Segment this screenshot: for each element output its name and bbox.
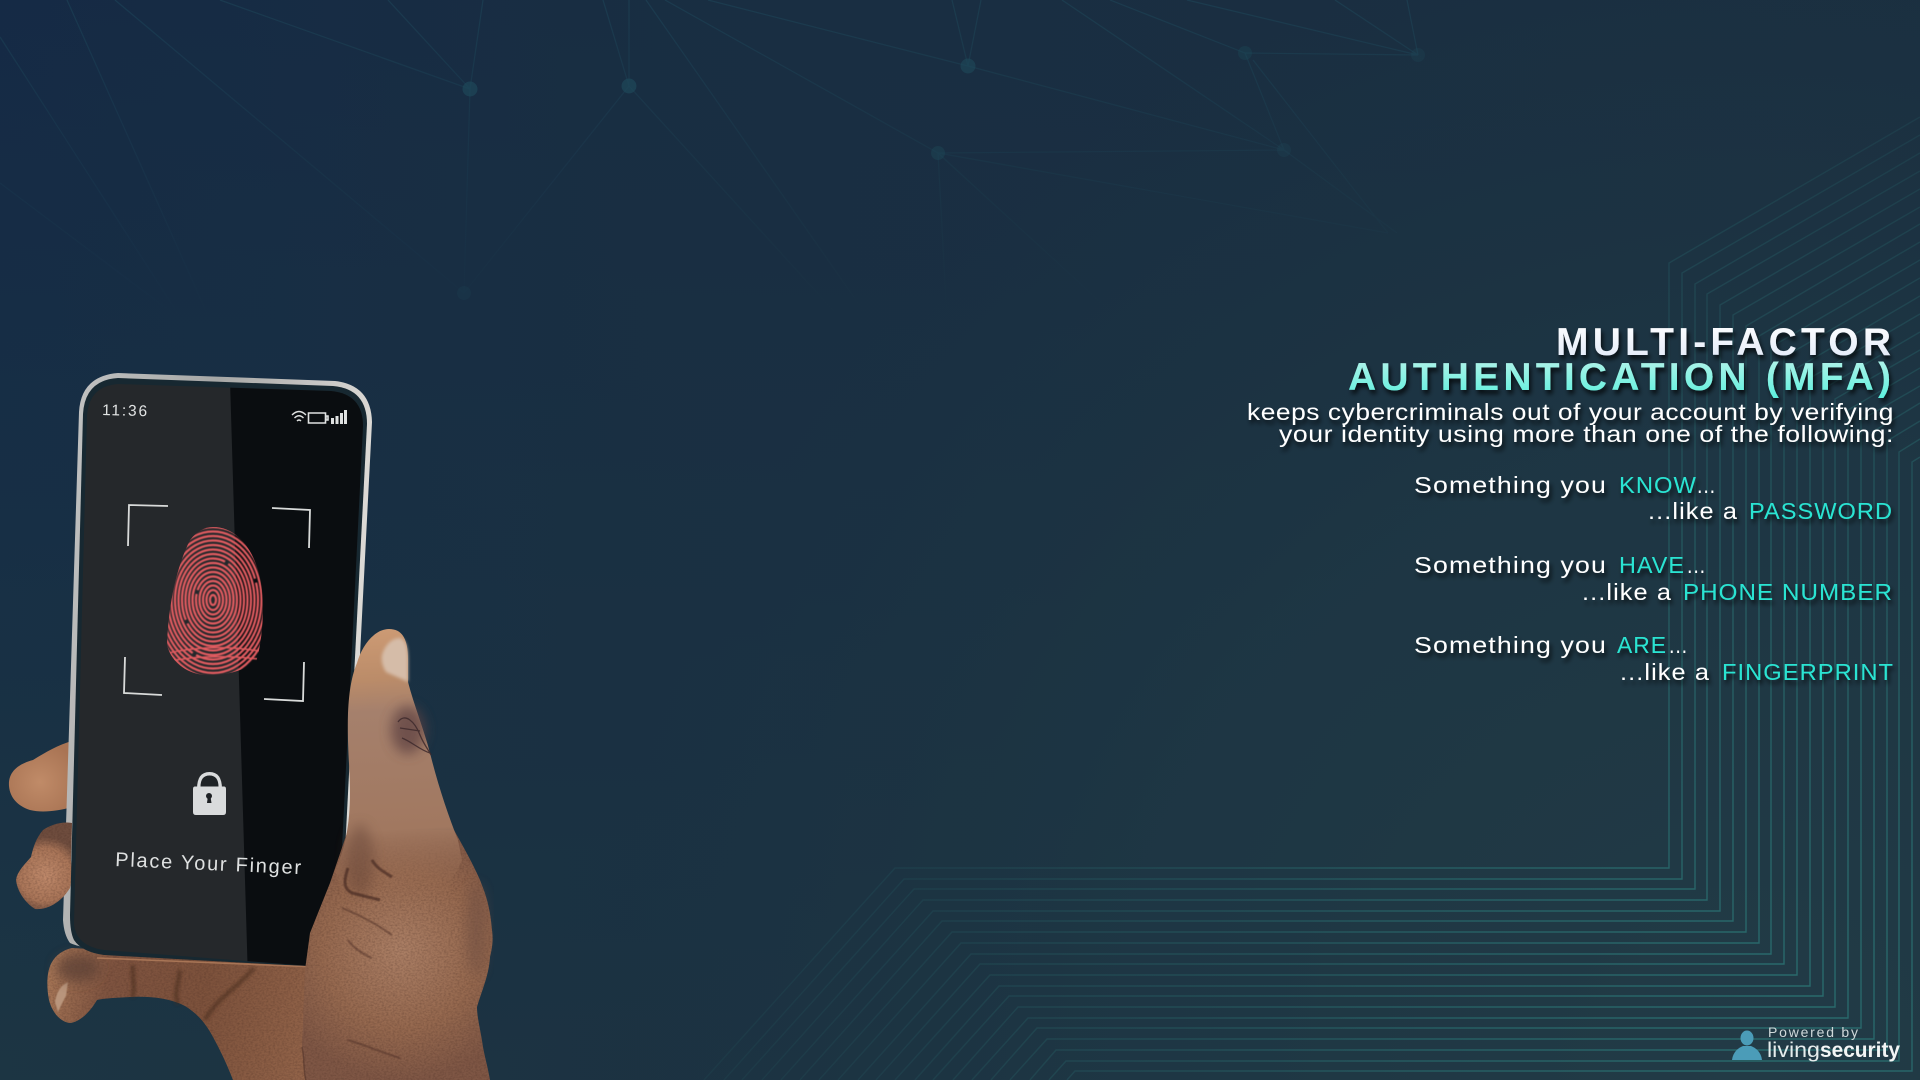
logo: powered by living security	[1732, 1024, 1900, 1062]
factor: have: ...like a	[1582, 579, 1672, 605]
scan brackets	[124, 505, 310, 701]
icon: signal bars	[331, 410, 347, 424]
knuckle wrinkles	[398, 718, 431, 755]
factor: know: ...	[1697, 472, 1716, 498]
phone bezel	[70, 378, 367, 968]
palm	[302, 830, 493, 1080]
factor: have: PHONE NUMBER	[1683, 579, 1893, 605]
factor: know: Something you	[1414, 472, 1607, 498]
factor: have: HAVE	[1619, 552, 1685, 578]
icon: middle finger	[16, 822, 72, 909]
lock icon	[193, 772, 226, 815]
wordmark living: living	[1767, 1039, 1820, 1062]
icon: lower finger and wrist	[47, 948, 320, 1080]
factor: are	[1414, 632, 1894, 685]
palm shading	[302, 824, 486, 1080]
title line 2: AUTHENTICATION (MFA)	[1348, 356, 1891, 399]
factor: are: ...	[1669, 632, 1688, 658]
thumb	[335, 629, 462, 905]
thumb and palm in front of phone	[302, 629, 493, 1080]
wordmark security: security	[1820, 1039, 1900, 1062]
knuckle shading	[391, 706, 425, 754]
factor: know: ...like a	[1648, 498, 1738, 524]
intro line 2: your identity using more than one of the following:	[1279, 421, 1894, 447]
title	[1348, 321, 1891, 399]
factor: are: Something you	[1414, 632, 1607, 658]
fingers behind phone	[9, 741, 320, 1080]
factor: are: FINGERPRINT	[1722, 659, 1894, 685]
fingerprint	[167, 527, 263, 675]
factor: know: PASSWORD	[1749, 498, 1893, 524]
clock: 11:36	[102, 402, 147, 420]
title line 1: MULTI-FACTOR	[1556, 321, 1891, 364]
thumbnail	[382, 638, 408, 682]
intro text	[1247, 399, 1894, 447]
icon: battery	[308, 413, 328, 423]
icon: wifi	[292, 412, 306, 421]
factor: are: ...like a	[1620, 659, 1710, 685]
icon: upper finger	[9, 741, 72, 811]
status icons	[292, 410, 347, 424]
intro line 1: keeps cybercriminals out of your account by verifying	[1247, 399, 1894, 425]
factor list	[1414, 472, 1894, 685]
icon: person	[1732, 1030, 1762, 1060]
phone screen	[74, 384, 363, 966]
phone frame	[63, 373, 372, 966]
factor: have: Something you	[1414, 552, 1607, 578]
powered by: Powered by	[1768, 1024, 1858, 1040]
screen caption: Place Your Finger	[115, 849, 302, 879]
factor: have	[1414, 552, 1893, 605]
phone bottom reflection	[97, 958, 340, 968]
factor: know: KNOW	[1619, 472, 1697, 498]
factor: know	[1414, 472, 1893, 524]
factor: have: ...	[1687, 552, 1706, 578]
circuit lines bottom right	[704, 117, 1920, 1080]
factor: are: ARE	[1617, 632, 1667, 658]
phone	[70, 378, 367, 968]
background network mesh	[0, 0, 1425, 320]
